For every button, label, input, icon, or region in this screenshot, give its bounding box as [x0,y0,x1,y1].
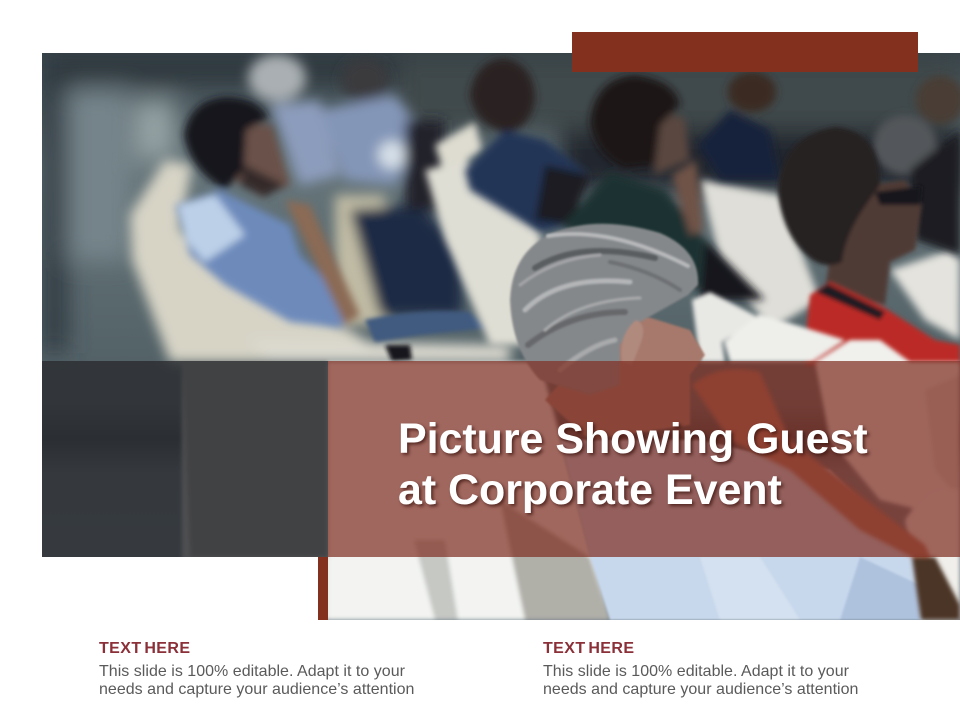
left body [99,663,414,698]
older man shirt [560,440,925,620]
far row people [248,54,462,325]
red top rectangle [572,32,918,72]
text block: right [543,640,858,698]
front chairs [692,292,960,620]
title: Picture Showing Guest [398,415,868,463]
right body [543,663,858,698]
armrest [365,311,488,362]
title [398,415,871,517]
right heading: TEXT HERE [543,640,634,657]
foreground-right man in red [778,127,960,365]
right body: This slide is 100% editable. Adapt it to your [543,663,849,680]
left chair row [130,160,510,362]
red vertical bar [318,557,328,620]
blue-shirt man [175,97,360,328]
older man head [510,224,705,440]
dark overlay panel [42,361,328,557]
left body: This slide is 100% editable. Adapt it to your [99,663,405,680]
front row chairs lower [182,362,610,620]
photo: audience seated at corporate event [42,32,960,620]
mid row people [465,58,960,300]
centre row chairs [425,122,960,345]
older man forearm and hand [692,369,960,620]
text block: left [99,640,414,698]
title: at Corporate Event [398,466,782,514]
background blur [42,53,960,353]
left heading: TEXT HERE [99,640,190,657]
red overlay panel [328,361,960,557]
right body: needs and capture your audience’s attention [543,681,858,698]
left body: needs and capture your audience’s attention [99,681,414,698]
